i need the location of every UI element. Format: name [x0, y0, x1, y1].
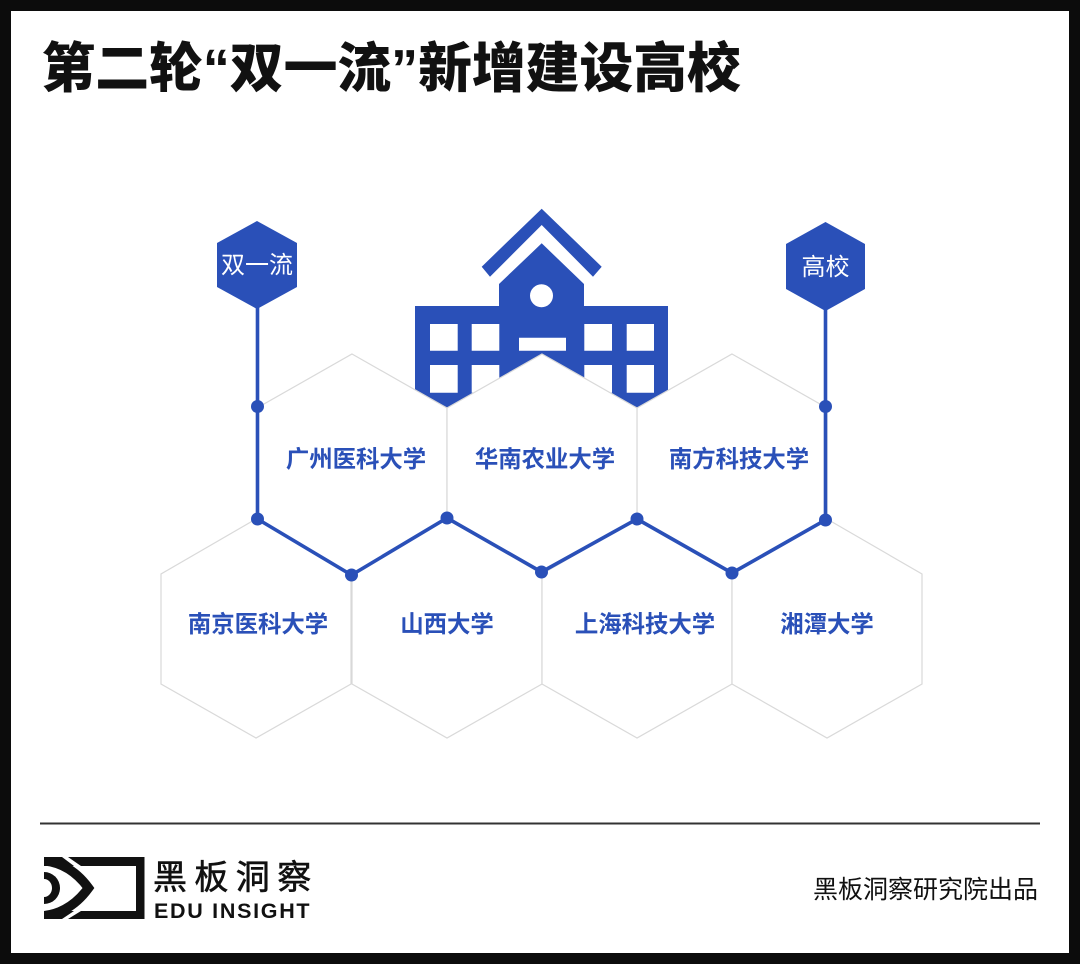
hexagon: 华南农业大学 cell	[447, 354, 637, 574]
icon: school building	[415, 209, 668, 408]
university names: 上海科技大学	[575, 611, 715, 637]
hexagon: 南方科技大学 cell	[637, 354, 827, 574]
footer divider	[40, 822, 1040, 824]
hexagon: 湘潭大学 cell	[732, 519, 922, 738]
title: 第二轮“双一流”新增建设高校	[42, 39, 741, 99]
hexagon label: 高校	[786, 222, 865, 311]
university names: 华南农业大学	[475, 446, 615, 472]
hexagon: 广州医科大学 cell	[257, 354, 447, 574]
credit text: 黑板洞察研究院出品	[813, 876, 1038, 904]
hexagon label: 双一流: 双一流	[221, 252, 293, 279]
connector line	[258, 305, 826, 575]
logo wordmark English: EDU INSIGHT	[154, 899, 311, 923]
hexagon label: 高校: 高校	[802, 254, 850, 281]
university names: 山西大学	[400, 611, 494, 637]
hexagon: 南京医科大学 cell	[161, 519, 351, 738]
university names: 南方科技大学	[669, 445, 809, 472]
hexagon grid	[161, 354, 922, 738]
university names: 湘潭大学	[780, 611, 874, 637]
university names: 南京医科大学	[188, 611, 328, 637]
university names	[188, 445, 874, 637]
hexagon label: 双一流	[217, 221, 297, 309]
logo mark	[44, 857, 144, 919]
logo wordmark Chinese: 黑板洞察	[153, 859, 319, 897]
hexagon: 山西大学 cell	[352, 519, 542, 738]
university names: 广州医科大学	[286, 446, 426, 472]
connector nodes	[251, 400, 832, 582]
hexagon: 上海科技大学 cell	[542, 519, 732, 738]
logo: EDU Insight	[44, 857, 311, 919]
